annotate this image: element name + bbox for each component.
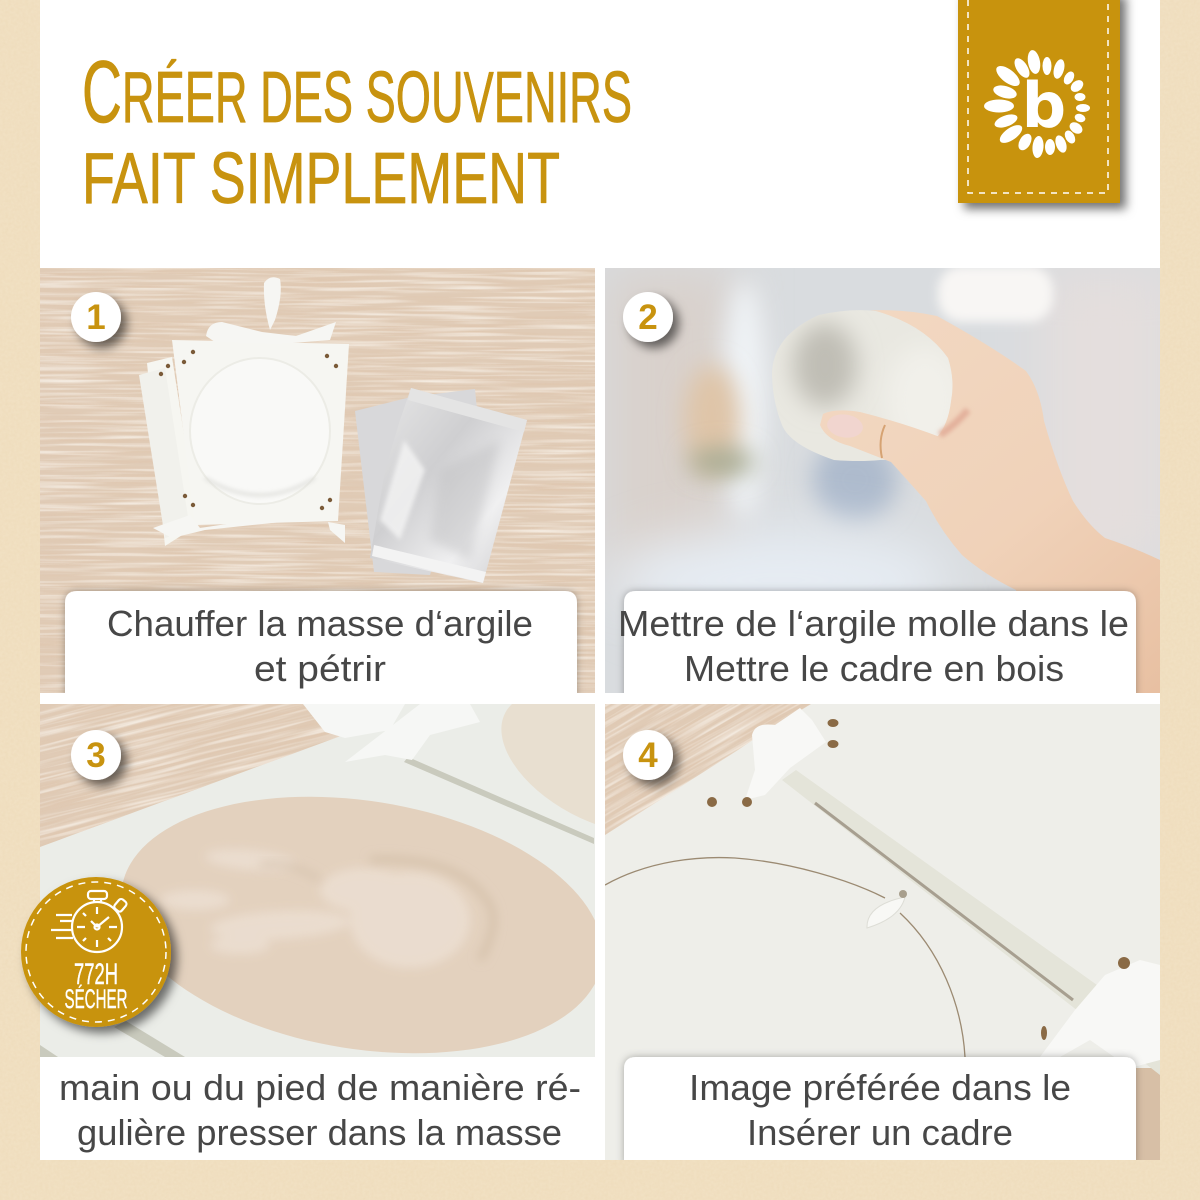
- ribbons: [745, 708, 1160, 1068]
- caption 3: [40, 1057, 595, 1160]
- clay foil packets: [355, 388, 527, 583]
- step number 3: 3: [86, 736, 106, 775]
- slots between frames: [40, 757, 594, 1057]
- wood corner: [40, 704, 340, 847]
- ribbon: [303, 704, 480, 762]
- frames: [605, 704, 1160, 1160]
- blurred background: [605, 266, 1170, 693]
- caption 2: Mettre de l‘argile molle dans le: [618, 603, 1129, 644]
- step number 1: [71, 292, 121, 342]
- brand tag with logo: [958, 0, 1120, 203]
- ribbon: [153, 277, 345, 543]
- logo letter: b: [1022, 69, 1066, 142]
- screw holes: [707, 719, 1130, 1040]
- panel 2: hand holding clay: [605, 266, 1170, 700]
- step number 1: 1: [86, 298, 106, 337]
- step number 4: [623, 730, 673, 780]
- caption 2: Mettre le cadre en bois: [684, 648, 1064, 689]
- caption 1: [65, 591, 577, 700]
- wooden frames: [139, 340, 349, 546]
- slot between frames: [782, 770, 1160, 1075]
- step number 4: 4: [638, 736, 658, 775]
- hand: [872, 310, 1160, 693]
- caption 4: Image préférée dans le: [689, 1067, 1071, 1108]
- step number 3: [71, 730, 121, 780]
- title: FAIT SIMPLEMENT: [82, 139, 560, 219]
- step number 2: [623, 292, 673, 342]
- step number 2: 2: [638, 298, 658, 337]
- logo flower petals: [984, 49, 1090, 158]
- caption 1: Chauffer la masse d‘argile: [107, 603, 533, 644]
- wood bottom right: [1136, 1068, 1160, 1160]
- icon: stopwatch: [51, 891, 128, 952]
- panel 4: inserting picture in frame: [605, 704, 1160, 1160]
- title: [82, 42, 632, 219]
- caption 1: et pétrir: [254, 648, 386, 689]
- drying time badge: SÉCHER: [64, 984, 128, 1014]
- caption 4: Insérer un cadre: [747, 1112, 1013, 1153]
- second clay print: [502, 704, 595, 824]
- caption 3: main ou du pied de manière ré-: [59, 1067, 581, 1108]
- circular picture window line: [605, 858, 965, 1057]
- white frame: [40, 704, 595, 1057]
- caption 3: gulière presser dans la masse: [77, 1112, 562, 1153]
- clay hand print: [123, 796, 595, 1054]
- caption 2: [618, 591, 1136, 700]
- thumb: [820, 410, 975, 501]
- wood corner: [605, 704, 811, 835]
- panel 3: hand print in clay: [40, 704, 595, 1057]
- panel 1: kit on wood table: [40, 268, 595, 700]
- wood texture: [40, 268, 595, 693]
- caption 4: [624, 1057, 1136, 1165]
- turn clip and screw: [867, 890, 907, 928]
- title: CRÉER DES SOUVENIRS: [82, 42, 632, 141]
- badge text: 772H: [74, 958, 118, 991]
- drying time badge: [21, 877, 171, 1027]
- clay ball: [772, 310, 952, 461]
